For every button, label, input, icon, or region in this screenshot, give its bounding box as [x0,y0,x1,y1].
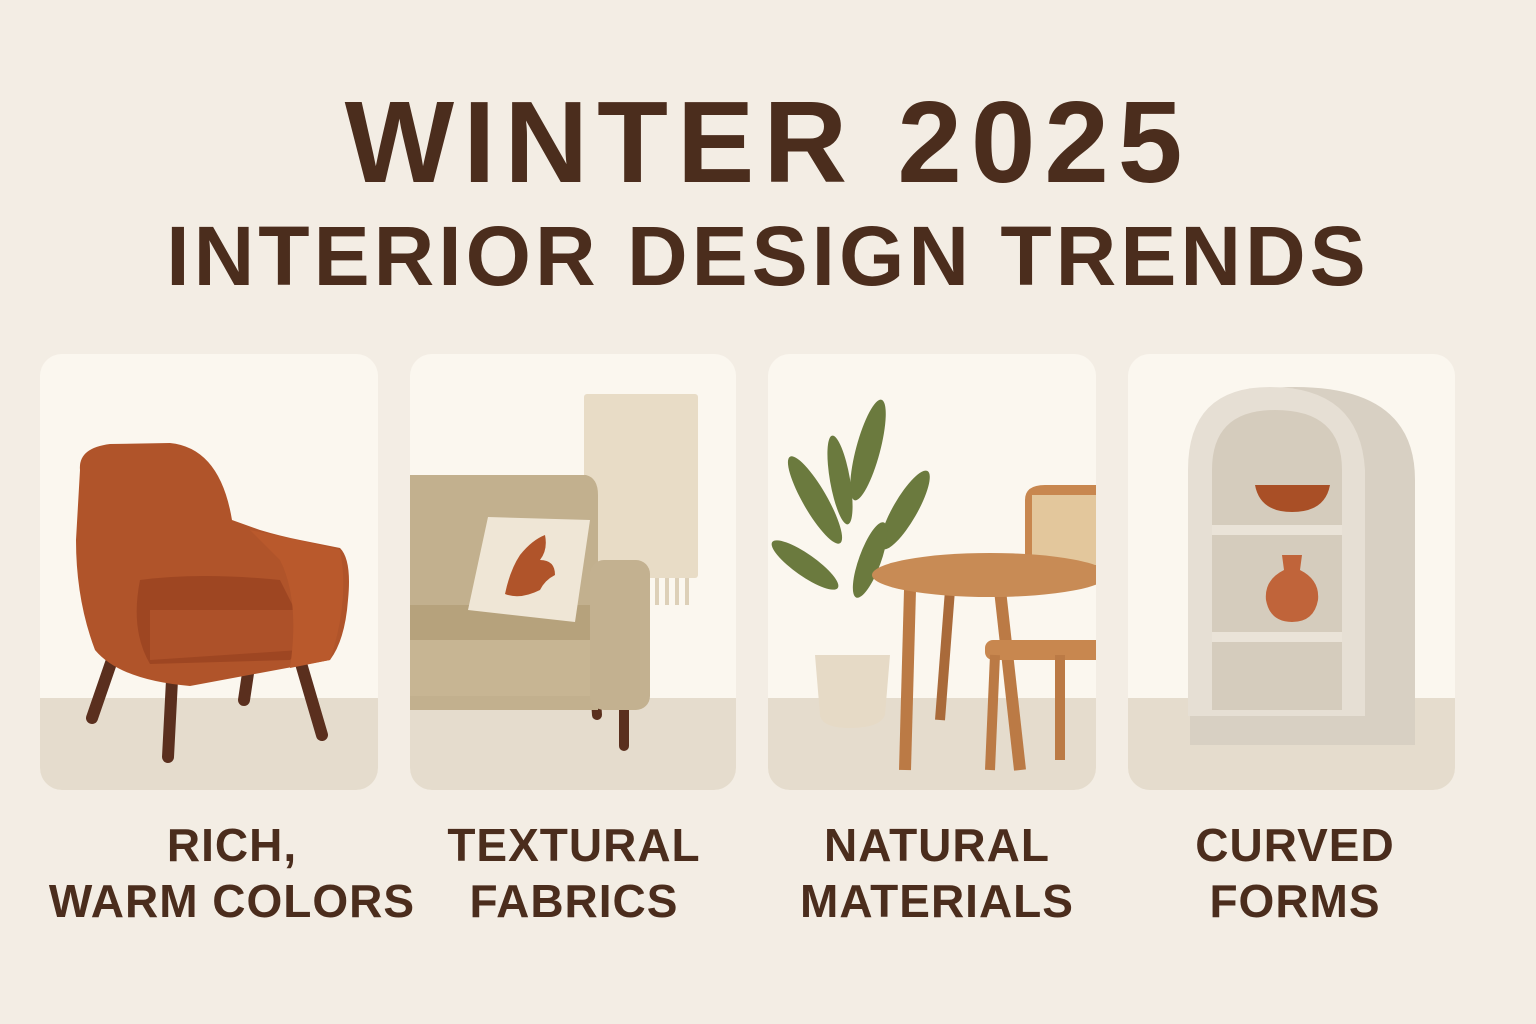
title: WINTER 2025 [345,77,1191,207]
icon: arched shelf [1188,387,1415,745]
label: textural fabrics: FABRICS [470,875,678,927]
icon: sofa with leaf pillow [410,475,650,746]
subtitle: INTERIOR DESIGN TRENDS [166,209,1370,303]
icon: throw blanket [584,394,698,605]
label: curved forms: FORMS [1209,875,1381,927]
label: rich warm colors: RICH, [167,819,297,871]
label: curved forms: CURVED [1195,819,1395,871]
label: rich warm colors: WARM COLORS [49,875,415,927]
label: curved forms [1195,819,1395,927]
icon: round table and cane chair [872,485,1108,770]
label: natural materials [800,819,1074,927]
panel: rich warm colors [40,354,378,790]
panel: curved forms [1128,354,1455,790]
label: textural fabrics [447,819,701,927]
icon: armchair [76,443,349,757]
panel: textural fabrics [410,354,736,790]
icon: potted plant [772,400,930,698]
panel: natural materials [766,354,1108,790]
label: textural fabrics: TEXTURAL [447,819,701,871]
label: natural materials: MATERIALS [800,875,1074,927]
label: natural materials: NATURAL [824,819,1050,871]
label: rich warm colors [48,819,415,927]
